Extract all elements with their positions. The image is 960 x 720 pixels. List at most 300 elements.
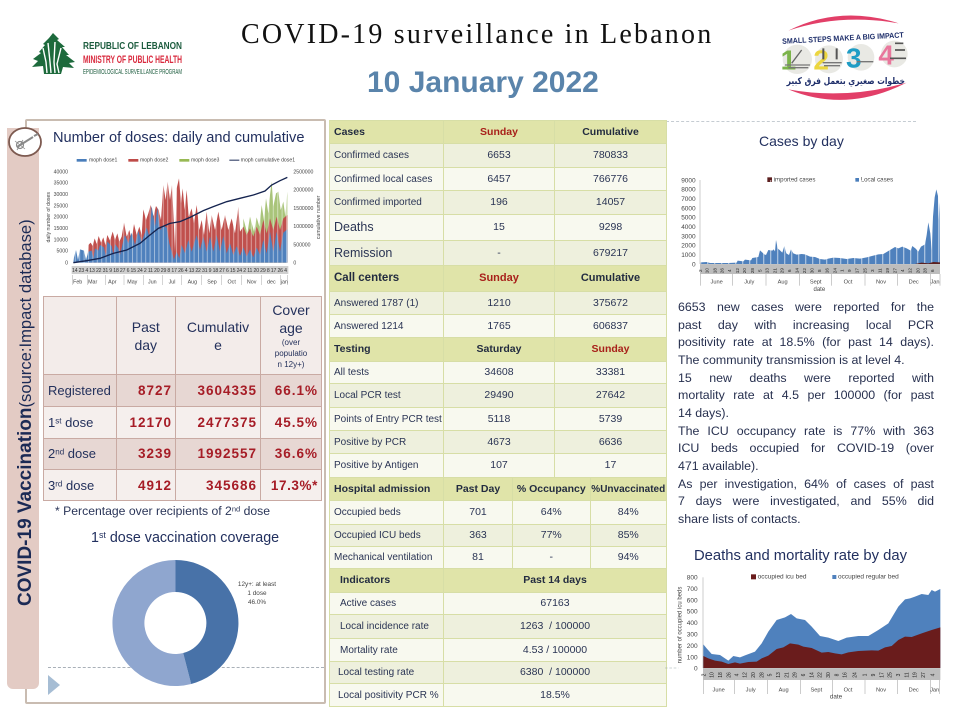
date axis: Nov	[247, 279, 257, 285]
legend	[767, 177, 893, 184]
y axis	[681, 177, 696, 268]
right axis labels: 2500000	[293, 169, 314, 175]
logo text: Republic of Lebanon: REPUBLIC OF LEBANON	[83, 41, 182, 52]
date axis: Oct	[228, 279, 236, 285]
y axis: 800	[687, 575, 698, 582]
date band: 1	[840, 269, 845, 272]
date band: July	[746, 687, 756, 693]
legend: Local cases	[861, 177, 893, 184]
date band: 13	[776, 672, 782, 678]
heading: number of doses: Number of doses: daily and cumulative	[53, 130, 304, 146]
date band: Dec	[909, 280, 919, 286]
legend: moph dose2	[140, 158, 169, 164]
left axis labels: 10000	[54, 237, 68, 243]
table section: testing: 5118	[488, 412, 510, 424]
right axis labels: 2000000	[293, 188, 314, 194]
y axis: 9000	[681, 177, 696, 184]
y axis: 3000	[681, 233, 696, 240]
date band: 26	[726, 672, 732, 678]
local cases area	[701, 189, 940, 264]
text block: daily summary: 14 days).	[678, 406, 729, 420]
table section: indicators: Active cases	[340, 598, 396, 609]
text block: daily summary: The community transmission is at level 4.	[678, 353, 905, 367]
table section: cases: 6457	[487, 172, 511, 184]
table section: cases: Cases	[334, 126, 365, 138]
date band: 5	[768, 673, 774, 676]
date band: 17	[879, 672, 885, 678]
date band: 21	[784, 672, 790, 678]
date band: date	[830, 693, 843, 700]
table: vaccination doses: n 12y+)	[278, 360, 304, 369]
y axis: 5000	[681, 215, 696, 222]
date axis: Jul	[169, 279, 175, 285]
table section: cases: -	[497, 246, 501, 258]
date band: Dec	[909, 687, 919, 693]
date band: Sept	[810, 280, 822, 286]
table section: cases: 196	[490, 196, 508, 208]
date heading: 10 January 2022	[367, 66, 599, 99]
date band: 21	[772, 268, 777, 273]
table section: cases: 14057	[596, 196, 625, 208]
y axis: 6000	[681, 205, 696, 212]
date band: 22	[818, 672, 824, 678]
icu bed area	[703, 627, 940, 668]
footnote: * Percentage over recipients of 2nd dose	[55, 504, 270, 518]
date band: 1	[863, 673, 869, 676]
table section: testing: All tests	[334, 367, 369, 378]
date band: June	[713, 687, 725, 693]
table section: cases: Sunday	[480, 126, 518, 138]
donut label: 46.0%	[248, 599, 266, 606]
vaccination sidebar	[7, 128, 39, 689]
text block: daily summary: As per investigation, 64% of cases of past	[678, 477, 934, 491]
table section: testing: Positive by Antigen	[334, 460, 418, 471]
table section: hospital admission: -	[550, 551, 553, 563]
stacked dose areas	[73, 177, 287, 263]
date axis	[72, 266, 288, 285]
table section: testing: Sunday	[592, 343, 629, 355]
date band: 25	[888, 672, 894, 678]
table section: indicators: 4.53 / 100000	[523, 644, 587, 656]
step 4 circle: 4	[878, 39, 894, 70]
text block: daily summary: ICU beds occupied for COVID-19 (over	[678, 441, 934, 455]
date band: 3	[896, 673, 902, 676]
date band: 11	[904, 672, 910, 678]
date band: 28	[759, 672, 765, 678]
date band: 6	[787, 269, 792, 272]
date band: 16	[824, 268, 829, 273]
date band: 20	[742, 268, 747, 273]
table section: call centers: 375672	[593, 296, 628, 308]
date band: 8	[817, 269, 822, 272]
left axis labels: 35000	[54, 181, 68, 187]
table section: testing: 5739	[599, 412, 622, 424]
date band: 3	[870, 269, 875, 272]
table section: call centers: 1765	[487, 320, 511, 332]
table: vaccination doses: (over	[282, 338, 300, 347]
table section: hospital admission	[330, 478, 666, 568]
date band: Aug	[778, 280, 788, 286]
y axis: 0	[692, 261, 696, 268]
chart: first dose donut	[112, 560, 276, 686]
date band: 19	[913, 672, 919, 678]
table: vaccination doses: 3239	[138, 446, 172, 461]
dashed line: top right	[666, 121, 916, 122]
y axis: 500	[687, 609, 698, 616]
legend: moph dose1	[89, 158, 118, 164]
y axis: 700	[687, 586, 698, 593]
date band: 4	[727, 269, 732, 272]
date band: 26	[720, 268, 725, 273]
y axis: 4000	[681, 224, 696, 231]
text block: daily summary: 471 available).	[678, 459, 759, 473]
date band: date	[813, 287, 826, 293]
date band: Oct	[844, 280, 853, 286]
sidebar vertical title: COVID-19 Vaccination(source:Impact database)	[15, 219, 36, 606]
icon: cedar tree	[32, 33, 75, 74]
date band: 25	[862, 268, 867, 273]
table section: testing: 29490	[484, 389, 514, 401]
bottom pink arc	[788, 83, 907, 100]
date band: June	[711, 280, 723, 286]
date band: 12	[908, 268, 913, 273]
table section: indicators: 67163	[540, 597, 570, 609]
date band: Jan	[930, 280, 940, 286]
y axis: number of occupied icu beds	[678, 587, 684, 663]
date band: 9	[871, 673, 877, 676]
donut label: 1 dose	[247, 590, 267, 597]
table section: indicators: Local incidence rate	[340, 621, 429, 632]
table section: testing: Positive by PCR	[334, 436, 406, 448]
chart: cases by day	[681, 177, 940, 293]
legend: occupied icu bed	[758, 574, 807, 581]
gaps between daily bars	[701, 180, 940, 264]
table section: hospital admission: Hospital admission	[334, 482, 430, 494]
date band: 30	[809, 268, 814, 273]
table section: cases: 9298	[599, 221, 622, 233]
left axis labels: 40000	[54, 169, 68, 175]
table section: call centers: 606837	[593, 320, 628, 332]
date band: 27	[893, 268, 898, 273]
date band: 6	[801, 673, 807, 676]
date axis: Feb	[73, 279, 82, 285]
date axis: dec	[267, 279, 276, 285]
table: vaccination doses: Past	[132, 318, 160, 334]
heading: cases by day: Cases by day	[759, 133, 844, 149]
date band: Aug	[779, 687, 789, 693]
left axis labels: daily number of doses	[46, 192, 52, 243]
table section: indicators: 1263 / 100000	[520, 620, 590, 632]
chart: occupied beds by day	[665, 574, 940, 700]
date band: 24	[832, 268, 837, 273]
table section: hospital admission: 84%	[618, 506, 639, 518]
dashed line stub	[665, 667, 678, 669]
step 1 circle	[781, 44, 812, 75]
date band: 29	[793, 672, 799, 678]
date axis: Jun	[148, 279, 157, 285]
arrow: next marker	[48, 675, 60, 695]
date axis: Mar	[88, 279, 97, 285]
logo text: Ministry of Public Health: MINISTRY OF PUBLIC HEALTH	[83, 54, 182, 66]
date band: 18	[718, 672, 724, 678]
pale divider strip	[665, 120, 667, 706]
imported cases area	[915, 262, 940, 264]
date band: 29	[780, 268, 785, 273]
date band: 9	[847, 269, 852, 272]
table section: cases	[330, 121, 666, 265]
donut 46 percent	[176, 560, 238, 684]
right axis labels: 0	[293, 260, 296, 266]
date band: Jan	[930, 687, 939, 693]
right axis labels: cumulative number	[316, 195, 322, 239]
left axis labels: 20000	[54, 215, 68, 221]
table section: cases: Deaths	[334, 220, 374, 234]
logo: Ministry of Public Health	[32, 33, 182, 76]
date band: 20	[751, 672, 757, 678]
table section: cases: Confirmed imported	[334, 197, 422, 208]
table section: testing: 6636	[599, 436, 622, 448]
date band: 27	[921, 672, 927, 678]
table section: hospital admission: 701	[469, 506, 487, 518]
donut remainder	[112, 560, 191, 686]
table section: cases: 15	[493, 221, 505, 233]
date band: Oct	[844, 687, 853, 693]
date band: 4	[900, 269, 905, 272]
table section: testing: 4673	[487, 436, 511, 448]
date band: 12	[735, 268, 740, 273]
table section: indicators: Indicators	[340, 574, 390, 586]
legend: imported cases	[774, 177, 815, 184]
date band	[702, 668, 940, 700]
step 3 circle	[846, 43, 874, 74]
right axis labels: 1500000	[293, 206, 314, 212]
legend	[77, 158, 295, 164]
table section: testing: Saturday	[477, 343, 521, 355]
left axis labels: 25000	[54, 203, 68, 209]
date band: 10	[710, 672, 716, 678]
table section: indicators: Mortality rate	[340, 644, 398, 656]
table section: hospital admission: Occupied beds	[334, 507, 401, 518]
table section: indicators: 6380 / 100000	[520, 666, 590, 678]
left axis labels: 30000	[54, 192, 68, 198]
date band: 28	[923, 268, 928, 273]
table: vaccination doses: day	[134, 336, 157, 352]
table: vaccination doses: Registered	[48, 383, 111, 398]
date band: 18	[712, 268, 717, 273]
table: vaccination doses: e	[214, 336, 222, 352]
table: vaccination doses: 45.5%	[275, 415, 318, 430]
left axis labels	[46, 169, 68, 266]
date band: 12	[743, 672, 749, 678]
right axis labels: 500000	[293, 242, 311, 248]
table section: hospital admission: % Occupancy	[517, 482, 586, 494]
table section: testing: Points of Entry PCR test	[334, 414, 442, 424]
table section: cases: 766776	[593, 172, 628, 184]
table: vaccination doses: 4912	[138, 478, 172, 492]
text block: daily summary: share lists of contacts.	[678, 512, 801, 526]
date band: 2	[702, 673, 708, 676]
table section: testing: 17	[605, 459, 616, 471]
text block: daily summary: 15 new deaths were reported with	[678, 371, 934, 385]
table: vaccination doses: 66.1%	[275, 383, 318, 398]
y axis: 8000	[681, 187, 696, 194]
date band: 17	[855, 268, 860, 273]
table section: call centers: Answered 1787 (1)	[334, 298, 418, 308]
y axis	[678, 575, 698, 672]
date band: 24	[853, 672, 859, 678]
date axis: May	[127, 279, 138, 285]
y axis: 2000	[681, 243, 696, 250]
step 2 circle: 2	[813, 44, 829, 75]
table section: hospital admission: 94%	[618, 551, 639, 563]
logo: small steps make a big impact	[781, 16, 908, 100]
y axis: 0	[694, 665, 698, 672]
table section: hospital admission: %Unvaccinated	[591, 484, 665, 494]
logo text: Epidemiological Surveillance Program: EPIDEMIOLOGICAL SURVEILLANCE PROGRAM	[83, 69, 182, 76]
donut label: 12y+: at least	[238, 581, 276, 588]
table section: cases: 780833	[593, 149, 628, 161]
slogan text: SMALL STEPS MAKE A BIG IMPACT	[782, 30, 904, 46]
date band: 11	[878, 268, 883, 273]
cumulative line	[73, 177, 287, 263]
left axis labels: 15000	[54, 226, 68, 232]
date band	[698, 264, 940, 293]
heading: first dose coverage: 1st dose vaccination coverage	[91, 530, 279, 546]
y axis: 400	[687, 620, 698, 627]
table section: cases: Confirmed local cases	[334, 174, 432, 184]
step 4 circle	[878, 39, 908, 70]
date band: 4	[930, 673, 936, 676]
date band: 20	[915, 268, 920, 273]
table section: indicators: Local testing rate	[338, 667, 414, 678]
table: vaccination doses: 8727	[138, 383, 172, 398]
top pink arc	[788, 16, 899, 31]
table: vaccination doses: age	[279, 320, 303, 336]
date band: Sept	[811, 687, 823, 693]
step 2 circle	[813, 44, 843, 75]
table: vaccination doses: 2nd dose	[48, 446, 96, 461]
title: COVID-19 surveillance in Lebanon	[241, 19, 713, 50]
table section: hospital admission: 363	[469, 529, 487, 541]
y axis: 7000	[681, 196, 696, 203]
table section: indicators	[330, 569, 666, 706]
table: vaccination doses: 1992557	[197, 446, 257, 461]
dashed line: panel bottom	[48, 667, 324, 668]
table: vaccination doses	[43, 296, 322, 501]
date band: 2	[698, 269, 703, 272]
table section: hospital admission: Past Day	[456, 482, 500, 494]
date band: 6	[930, 269, 935, 272]
date band: Nov	[876, 280, 886, 286]
icon: syringe badge	[8, 127, 42, 157]
table section: hospital admission: Occupied ICU beds	[334, 530, 421, 541]
table section: cases: Remission	[334, 246, 392, 260]
table: vaccination doses: 1st dose	[48, 415, 93, 430]
y axis: 300	[687, 632, 698, 639]
table: vaccination doses: Cover	[272, 302, 310, 318]
step 3 circle: 3	[846, 43, 862, 74]
table: vaccination doses: 12170	[129, 415, 172, 430]
table: vaccination doses: 3604335	[197, 383, 257, 398]
legend: moph dose3	[191, 158, 220, 164]
table section: cases: Confirmed cases	[334, 150, 409, 161]
date axis: Aug	[188, 279, 197, 285]
text block: daily summary: mortality rate at 4.5 per 100000 (for past	[678, 388, 934, 402]
table section: indicators: 18.5%	[540, 688, 570, 700]
date band: 13	[765, 268, 770, 273]
y axis: 100	[687, 654, 698, 661]
date band: Nov	[876, 687, 886, 693]
table section: hospital admission: 81	[472, 551, 484, 563]
table section: call centers	[330, 266, 666, 337]
date band: 5	[757, 269, 762, 272]
table section: testing: Local PCR test	[334, 390, 401, 401]
regular bed area	[703, 589, 940, 668]
date axis: Sep	[207, 279, 217, 285]
text block: daily summary: 6653 new cases were reported for the	[678, 300, 934, 314]
date band: 28	[750, 268, 755, 273]
heading: deaths and mortality: Deaths and mortality rate by day	[694, 548, 907, 564]
table: vaccination doses: Cumulativ	[187, 318, 249, 334]
legend	[751, 574, 899, 581]
step 1 circle: 1	[781, 44, 796, 75]
date band: 8	[834, 673, 840, 676]
date axis: 14 23 4 13 22 31 9 18 27 6 15 24 2 11 20 29 8 17 26 4 13 22 31 9 18 27 6 15 24 2 11 20 29 8 17 26 4	[72, 268, 287, 274]
text block: daily summary: The ICU occupancy rate is 77% with 363	[678, 424, 934, 438]
date band: 19	[885, 268, 890, 273]
table section: call centers: Answered 1214	[334, 320, 404, 332]
table section: hospital admission: 85%	[618, 529, 639, 541]
y axis: 200	[687, 643, 698, 650]
panel: vaccination	[25, 119, 326, 704]
table section: testing: Testing	[334, 343, 371, 355]
date axis: jan	[280, 279, 288, 285]
table: vaccination doses: 36.6%	[275, 446, 318, 461]
table section: testing	[330, 338, 666, 477]
chart: doses daily and cumulative	[46, 158, 322, 285]
Arabic slogan: خطوات صغيري بتعمل فرق كبير	[786, 76, 905, 87]
table section: call centers: Cumulative	[581, 272, 640, 284]
table section: cases: 679217	[593, 246, 628, 258]
table: vaccination doses: 2477375	[197, 415, 257, 430]
table section: hospital admission: Mechanical ventilation	[334, 552, 432, 563]
date band: 30	[826, 672, 832, 678]
date band: 14	[809, 672, 815, 678]
table: surveillance indicators	[329, 120, 667, 707]
left axis labels: 0	[65, 260, 68, 266]
text block: daily summary: positivity rate at 18.5% (for past 14 days).	[678, 335, 934, 349]
y axis: 600	[687, 597, 698, 604]
y axis: 1000	[681, 252, 696, 259]
table section: hospital admission: 77%	[541, 529, 562, 541]
table section: testing: 107	[490, 459, 508, 471]
left axis labels: 5000	[57, 249, 68, 255]
table section: call centers: 1210	[487, 296, 511, 308]
table section: testing: 34608	[484, 366, 514, 378]
date axis: Apr	[108, 279, 117, 285]
date band: 22	[802, 268, 807, 273]
table: vaccination doses: 17.3%*	[271, 478, 318, 492]
text block: daily summary: past day with increasing local PCR	[678, 318, 934, 332]
right axis labels: 1000000	[293, 224, 314, 230]
date band: 16	[843, 672, 849, 678]
table section: hospital admission: 64%	[541, 506, 562, 518]
text block: daily summary: 7 days were investigated, and 55% did	[678, 494, 934, 508]
text block: daily summary	[678, 300, 934, 526]
date band: 10	[705, 268, 710, 273]
table: vaccination doses: populatio	[275, 349, 307, 358]
date band: July	[744, 280, 755, 286]
